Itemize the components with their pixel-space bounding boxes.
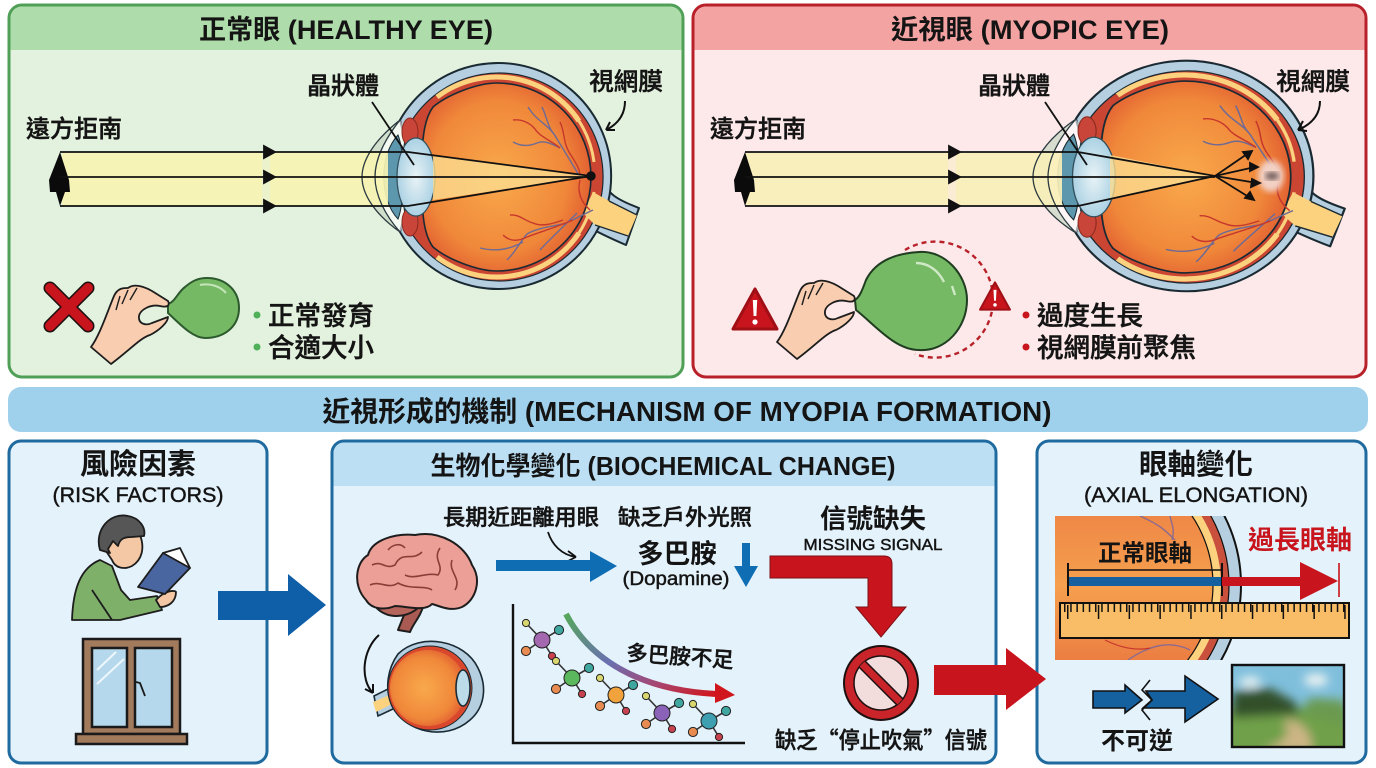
icon: hand [91, 286, 169, 364]
healthy focus cone [433, 155, 591, 200]
icon: prohibition sign [843, 645, 919, 721]
gradient decline arrowhead [715, 683, 735, 703]
icon: brain [357, 534, 477, 632]
retina pointer arrow [1298, 101, 1320, 131]
label: lens: 晶狀體 [978, 66, 1050, 101]
break mark [1142, 680, 1152, 720]
icon: window [76, 639, 187, 744]
eye cross-section crop [1055, 516, 1242, 660]
banner: mechanism heading [8, 387, 1368, 432]
retina pointer arrow [606, 101, 625, 130]
bullet list: healthy: 合適大小 [268, 326, 374, 365]
label: missing signal english: MISSING SIGNAL [804, 537, 943, 554]
label: prolonged near work: 長期近距離用眼 [443, 500, 599, 532]
gradient decline arrow [566, 614, 716, 694]
lens leader line [1045, 102, 1087, 165]
label: irreversible: 不可逆 [1101, 721, 1173, 756]
myopic cornea outline [1033, 119, 1076, 233]
myopic header band [694, 6, 1364, 50]
label: retina: 視網膜 [1276, 63, 1350, 98]
label: excessive axis: 過長眼軸 [1248, 520, 1352, 557]
label: distant target: 遠方拒南 [26, 109, 122, 144]
healthy header band [10, 6, 682, 50]
dashed growth outline [905, 242, 993, 358]
icon: large balloon [855, 252, 967, 350]
panel: biochemical change [332, 441, 996, 763]
heading: axial elongation: 眼軸變化 [1139, 442, 1253, 483]
small curved arrow [548, 532, 576, 561]
healthy eye anatomy [362, 63, 639, 289]
label: lack of outdoor light: 缺乏戶外光照 [618, 500, 752, 532]
blurred landscape [1230, 664, 1346, 748]
label: no stop signal: 缺乏“停止吹氣”信號 [775, 721, 987, 755]
chart axes [513, 604, 745, 743]
panel: axial elongation [1036, 440, 1368, 764]
subheading: axial elongation: (AXIAL ELONGATION) [1084, 484, 1308, 507]
normal axis bar [1068, 563, 1222, 596]
arrow: red elbow [770, 556, 906, 637]
lens leader line [372, 102, 414, 165]
arrow: dopamine decrease [734, 543, 758, 587]
arrow: excessive axis [1222, 562, 1338, 600]
bullet list: myopic [1022, 294, 1196, 365]
bullet list: healthy: 正常發育 [268, 294, 374, 333]
icon: red cross [50, 288, 88, 326]
label: normal axis: 正常眼軸 [1098, 534, 1192, 568]
arrow: long segment [1143, 676, 1218, 722]
label: missing signal: 信號缺失 [820, 497, 926, 536]
heading: biochemical change: 生物化學變化 (BIOCHEMICAL CHANGE) [430, 451, 896, 481]
icon: balloon [168, 278, 239, 338]
heading: myopic eye: 近視眼 (MYOPIC EYE) [891, 15, 1169, 45]
blurred dark spot [1265, 172, 1279, 180]
myopic light rays [745, 146, 1260, 212]
myopic focus cone [1110, 155, 1215, 200]
chart: dopamine decline [513, 604, 745, 743]
label: dopamine deficiency: 多巴胺不足 [625, 636, 735, 675]
icon: warning right [980, 282, 1010, 310]
end tick [1338, 563, 1340, 597]
healthy light rays [60, 146, 595, 212]
subheading: risk factors: (RISK FACTORS) [52, 484, 224, 507]
panel: healthy eye [9, 5, 683, 377]
heading: healthy eye: 正常眼 (HEALTHY EYE) [199, 15, 493, 45]
label: dopamine: 多巴胺 [637, 532, 717, 571]
label: retina: 視網膜 [589, 63, 663, 98]
label: dopamine english: (Dopamine) [622, 569, 730, 590]
bullet list: myopic: 過度生長 [1037, 294, 1143, 333]
ruler [1060, 603, 1349, 638]
arrow: blue to dopamine [496, 551, 617, 582]
healthy cornea outline [362, 120, 400, 232]
panel: myopic eye [693, 5, 1366, 377]
distant object icon [49, 152, 70, 206]
distant object icon [734, 152, 755, 206]
arrow: short segment [1093, 685, 1142, 713]
bullet list: healthy [254, 294, 374, 365]
icon: warning left [733, 289, 777, 329]
icon: red cross fill [50, 288, 88, 326]
icon: small eye [373, 641, 484, 732]
arrow: risk to biochemical [218, 574, 326, 636]
panel: risk factors [9, 441, 267, 763]
myopic eye anatomy [1033, 61, 1345, 291]
icon: person reading [72, 515, 190, 620]
molecules [521, 619, 731, 741]
curved arrow brain to eye [365, 635, 379, 693]
blurred retinal spot [1258, 160, 1284, 192]
icon: hand [777, 281, 855, 359]
biochemical header band [334, 442, 994, 486]
label: lens: 晶狀體 [307, 66, 379, 101]
bullet list: myopic: 視網膜前聚焦 [1037, 326, 1196, 365]
banner: mechanism heading: 近視形成的機制 (MECHANISM OF MYOPIA FORMATION) [322, 396, 1052, 427]
label: distant target: 遠方拒南 [710, 109, 806, 144]
healthy light beam [62, 152, 388, 206]
heading: risk factors: 風險因素 [80, 441, 196, 483]
myopic light beam [746, 152, 1062, 206]
arrow: biochemical to axial [934, 648, 1046, 710]
